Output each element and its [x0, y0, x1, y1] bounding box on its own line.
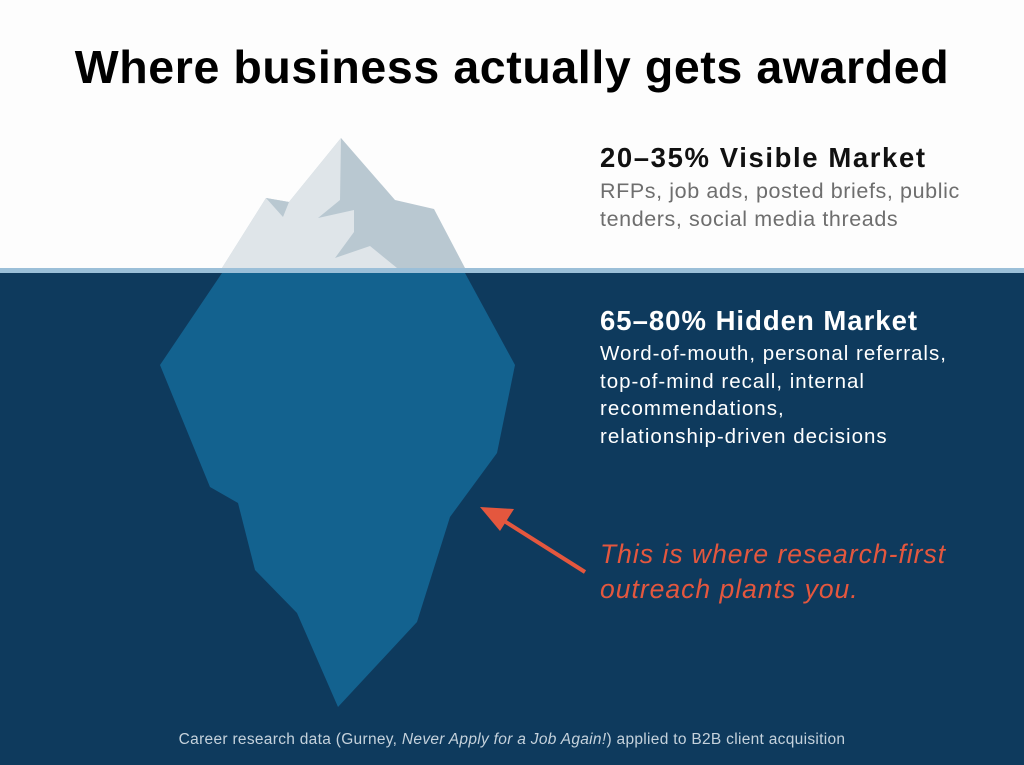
hidden market text: top-of-mind recall, internal [600, 370, 865, 392]
callout: outreach plants you. [600, 574, 859, 604]
visible market text: tenders, social media threads [600, 207, 898, 231]
hidden market text: 65–80% Hidden Market [600, 305, 918, 336]
footer: Career research data (Gurney, Never Apply for a Job Again!) applied to B2B client acquisition [179, 731, 845, 748]
arrow [480, 507, 586, 574]
visible market text: 20–35% Visible Market [600, 142, 927, 173]
iceberg underwater [160, 273, 515, 707]
hidden market text: relationship-driven decisions [600, 424, 888, 448]
water [0, 272, 1024, 765]
iceberg tip [222, 138, 465, 268]
callout: This is where research-first [600, 539, 946, 569]
hidden market text [600, 305, 947, 448]
title: Where business actually gets awarded [75, 41, 949, 93]
hidden market text: recommendations, [600, 397, 785, 420]
callout [600, 539, 946, 604]
hidden market text: Word-of-mouth, personal referrals, [600, 342, 947, 365]
visible market text [600, 142, 960, 231]
visible market text: RFPs, job ads, posted briefs, public [600, 179, 960, 203]
